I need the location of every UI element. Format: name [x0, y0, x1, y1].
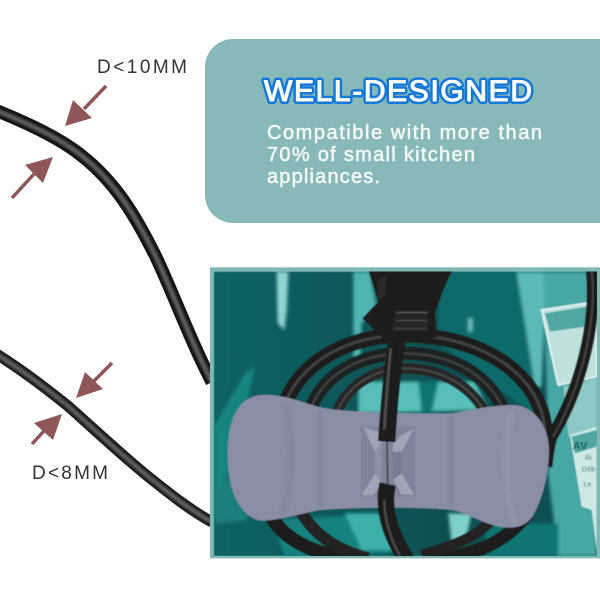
silicone cable clip [228, 395, 549, 528]
text block: compatibility description: appliances. [267, 166, 380, 188]
cable: 10 mm thick [0, 110, 212, 382]
cable: 8 mm thick [0, 353, 212, 522]
arrow: upper cable from above [65, 86, 106, 126]
label: D<8MM: D<8MM [32, 463, 108, 484]
appliance warning labels: Ri [585, 453, 592, 462]
power plug [362, 270, 452, 341]
label: D<10MM: D<10MM [97, 57, 187, 78]
arrow: upper cable from below [12, 157, 53, 198]
appliance warning labels: AV [573, 440, 588, 452]
heading: well-designed: WELL-DESIGNED [264, 75, 532, 108]
appliance warning labels: Déb [582, 465, 595, 474]
heading: well-designed: WELL-DESIGNED [264, 75, 532, 108]
photo background [214, 272, 597, 556]
text block: compatibility description: 70% of small kitchen [267, 144, 475, 166]
arrow: lower cable from above [76, 363, 112, 398]
coiled power cord [267, 270, 593, 560]
arrow: lower cable from below [32, 414, 62, 444]
text block: compatibility description: Compatible with more than [267, 122, 542, 144]
clip center slot [361, 427, 415, 497]
panel: well-designed text card [205, 39, 600, 223]
cord through clip [384, 342, 407, 560]
text block: compatibility description [267, 122, 542, 188]
panel: product photo [210, 267, 600, 560]
appliance warning labels: Le [583, 480, 591, 489]
appliance warning labels [542, 302, 597, 550]
